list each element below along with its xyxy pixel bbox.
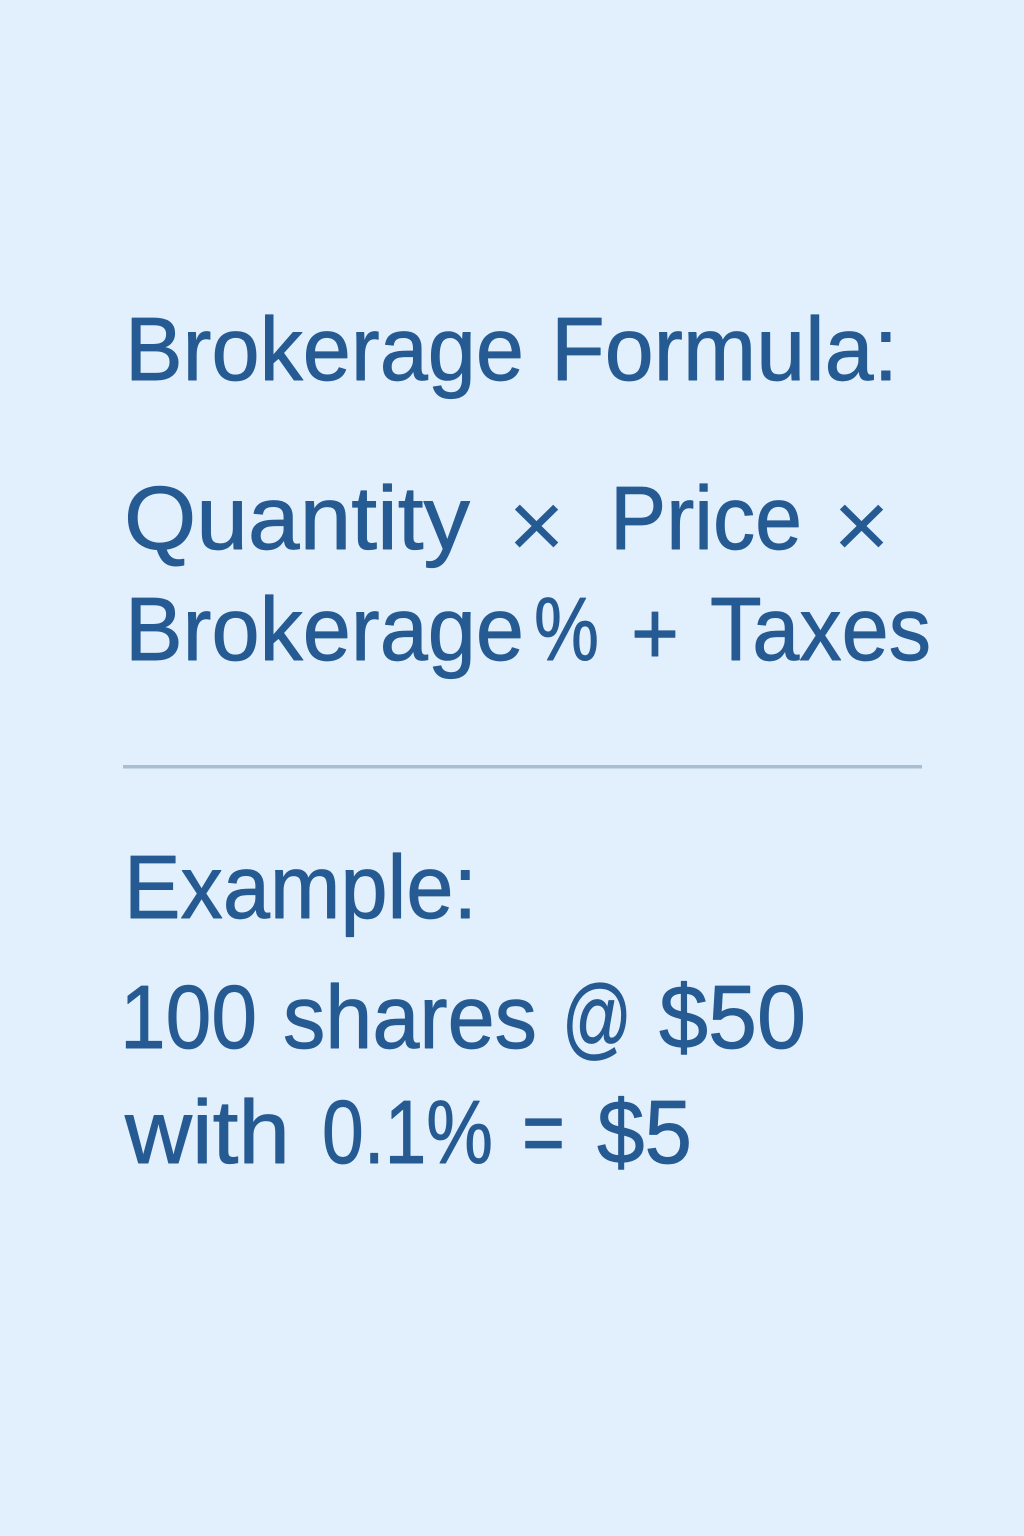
example calculation: @ (562, 968, 632, 1068)
formula text: Taxes (710, 580, 931, 680)
example calculation: shares (283, 968, 537, 1068)
heading: brokerage formula: Brokerage (125, 300, 524, 400)
example calculation: $50 (659, 968, 806, 1068)
formula text: Quantity (124, 469, 470, 569)
formula text: Brokerage (125, 580, 524, 680)
example calculation: with (124, 1083, 290, 1183)
formula text: × (508, 472, 565, 579)
heading: brokerage formula: Formula: (551, 300, 898, 400)
example calculation: 100 (120, 968, 257, 1068)
example calculation: $5 (597, 1083, 692, 1183)
formula text: Price (610, 469, 802, 569)
formula text: + (631, 584, 679, 684)
example calculation: 0.1% (322, 1083, 493, 1183)
formula text: × (833, 472, 890, 579)
formula text (124, 469, 931, 684)
formula text: % (534, 580, 599, 680)
heading: brokerage formula (125, 300, 898, 400)
example calculation: = (522, 1083, 565, 1183)
example label: Example: (124, 838, 477, 938)
example calculation (120, 968, 806, 1183)
